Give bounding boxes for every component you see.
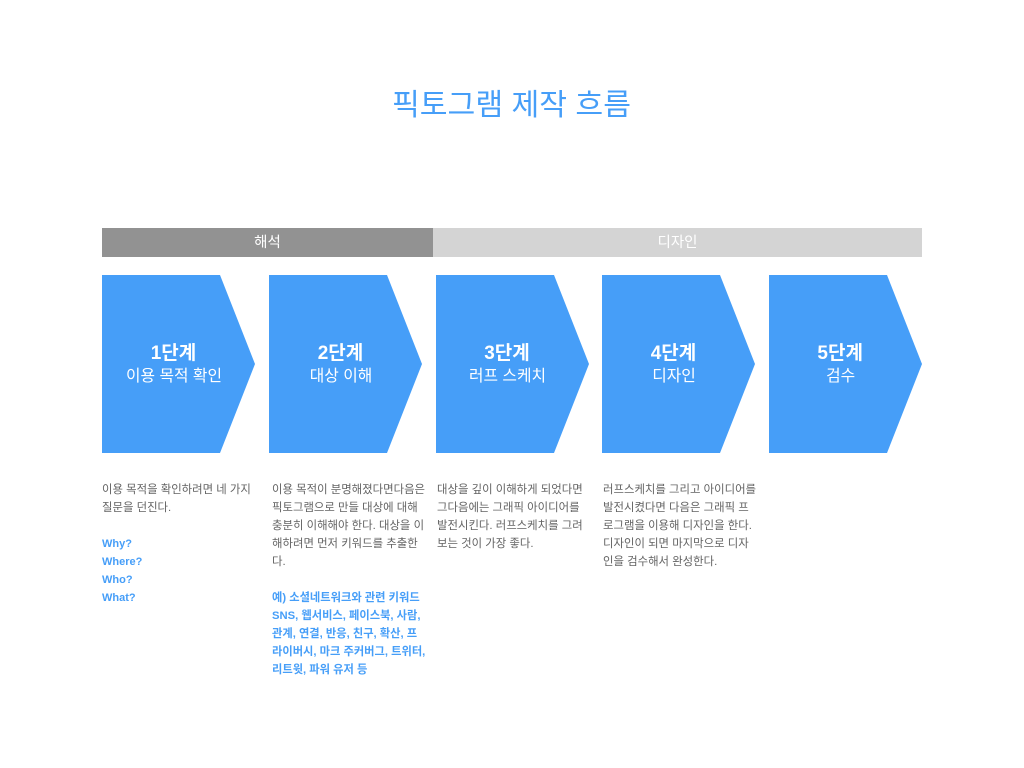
step 1 arrow: 이용 목적 확인 [126, 368, 222, 384]
step 5 arrow [769, 275, 922, 453]
text: step 1 description: 이용 목적을 확인하려면 네 가지 [102, 484, 251, 496]
step 5 arrow: 5단계 [817, 342, 863, 364]
text: step 4 description: 디자인이 되면 마지막으로 디자 [603, 538, 749, 550]
text: step 2 description: 라이버시, 마크 주커버그, 트위터, [272, 646, 425, 658]
step 4 arrow: 디자인 [652, 368, 696, 384]
band: 디자인: 디자인 [657, 235, 698, 251]
text: step 2 description: 예) 소셜네트워크와 관련 키워드 [272, 592, 420, 604]
step 5 arrow: 검수 [826, 368, 855, 384]
step 2 arrow: 2단계 [318, 342, 363, 364]
text: step 4 description [603, 483, 756, 568]
text: step 3 description [437, 483, 583, 550]
text: step 1 description: Why? [102, 538, 132, 550]
step 2 arrow [269, 275, 422, 453]
step 1 arrow: 1단계 [151, 342, 196, 364]
text: step 1 description: 질문을 던진다. [102, 502, 171, 514]
title: 픽토그램 제작 흐름 [392, 89, 631, 122]
step 3 arrow: 3단계 [484, 342, 530, 364]
text: step 2 description: 리트윗, 파워 유저 등 [272, 664, 367, 676]
text: step 3 description: 대상을 깊이 이해하게 되었다면 [437, 484, 583, 496]
text: step 2 description: 해하려면 먼저 키워드를 추출한 [272, 538, 418, 550]
text: step 2 description: 관계, 연결, 반응, 친구, 확산, 프 [272, 628, 417, 640]
step 3 arrow [436, 275, 589, 453]
text: step 2 description: SNS, 웹서비스, 페이스북, 사람, [272, 610, 421, 622]
text: step 2 description [272, 483, 425, 676]
text: step 3 description: 그다음에는 그래픽 아이디어를 [437, 502, 580, 514]
text: step 4 description: 로그램을 이용해 디자인을 한다. [603, 520, 752, 532]
step 4 arrow [602, 275, 755, 453]
text: step 1 description: Where? [102, 556, 142, 568]
text: step 1 description: Who? [102, 574, 133, 586]
text: step 3 description: 발전시킨다. 러프스케치를 그려 [437, 520, 583, 532]
text: step 2 description: 이용 목적이 분명해졌다면다음은 [272, 484, 425, 496]
step 3 arrow: 러프 스케치 [469, 368, 546, 384]
text: step 1 description: What? [102, 592, 136, 604]
text: step 3 description: 보는 것이 가장 좋다. [437, 538, 534, 550]
step 1 arrow [102, 275, 255, 453]
band: 해석: 해석 [254, 235, 281, 251]
text: step 4 description: 인을 검수해서 완성한다. [603, 556, 717, 568]
text: step 2 description: 픽토그램으로 만들 대상에 대해 [272, 502, 418, 514]
text: step 4 description: 러프스케치를 그리고 아이디어를 [603, 484, 756, 496]
band: 해석 [102, 228, 433, 257]
text: step 2 description: 다. [272, 556, 286, 568]
text: step 4 description: 발전시켰다면 다음은 그래픽 프 [603, 502, 749, 514]
text: step 1 description [102, 483, 251, 604]
band: 디자인 [433, 228, 922, 257]
text: step 2 description: 충분히 이해해야 한다. 대상을 이 [272, 520, 424, 532]
step 2 arrow: 대상 이해 [310, 368, 372, 384]
step 4 arrow: 4단계 [651, 342, 696, 364]
